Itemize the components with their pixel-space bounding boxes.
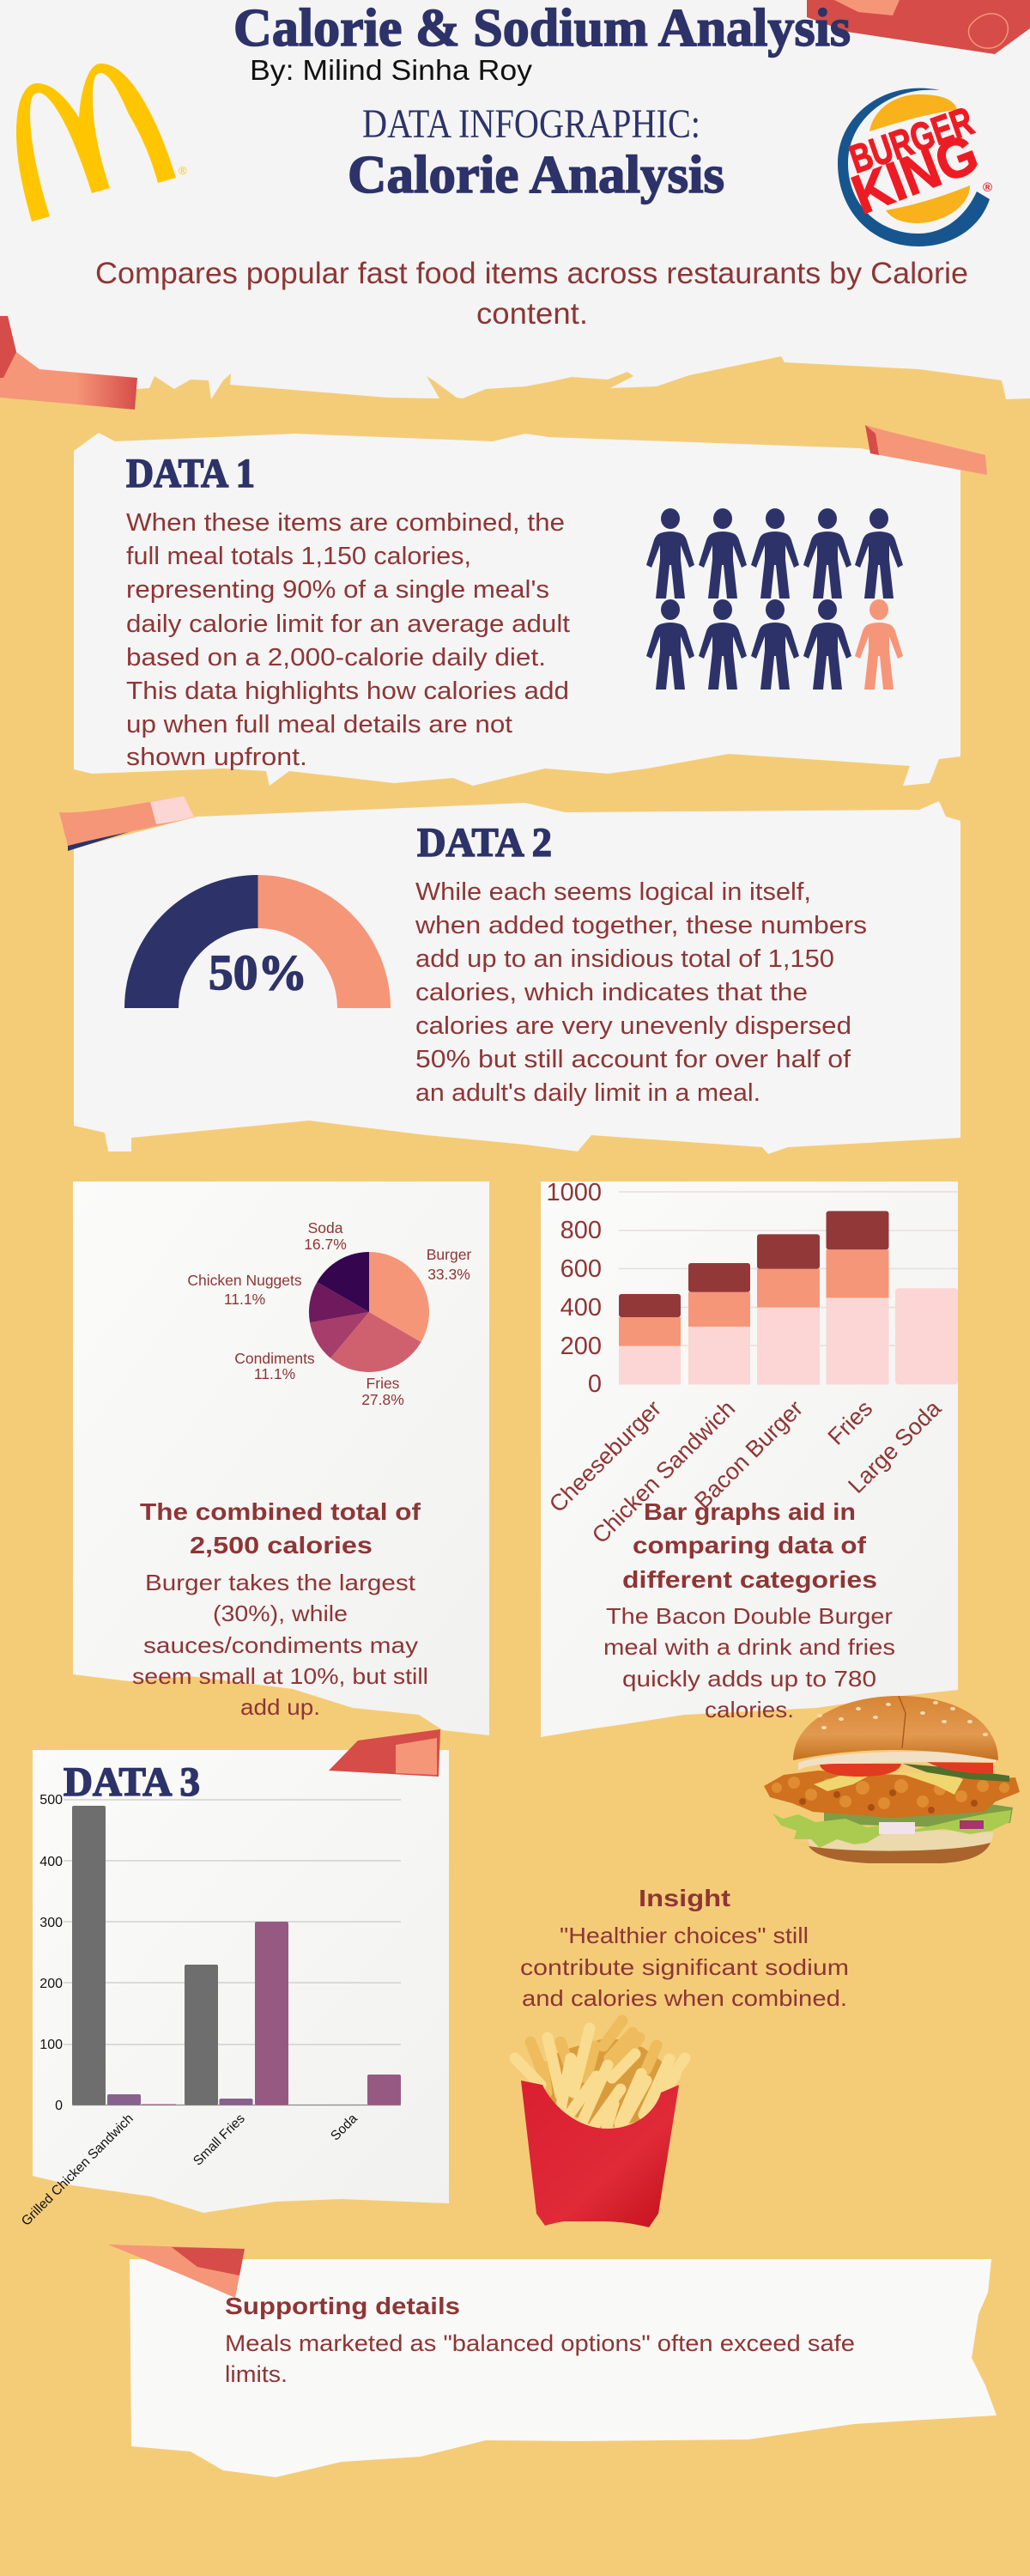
ribbon: data 1 — [865, 425, 987, 475]
bar chart: stacked calories: 0 — [588, 1370, 602, 1398]
card: data 3 chart — [19, 1729, 449, 2229]
heading: data 1: DATA 1 — [126, 451, 255, 496]
bar chart: grouped values: 300 — [39, 1916, 63, 1930]
pie labels: Fries — [367, 1375, 400, 1392]
heading: bar graphs: Bar graphs aid in — [644, 1498, 856, 1525]
pie labels: 33.3% — [427, 1266, 470, 1283]
bar chart: stacked calories: 400 — [560, 1294, 602, 1321]
bar chart: grouped values: Soda — [328, 2111, 360, 2143]
bar chart: stacked calories: Chicken Sandwich — [587, 1395, 740, 1548]
ribbon: top right — [807, 0, 1030, 54]
body text: combined total: seem small at 10%, but still — [132, 1663, 428, 1689]
illustration: french fries — [515, 2020, 685, 2227]
body text: data 1: representing 90% of a single meal's — [126, 576, 549, 604]
body text: data 2: While each seems logical in itself, — [415, 878, 811, 906]
body text: data 1: up when full meal details are not — [126, 711, 512, 738]
subtitle: data infographic: DATA INFOGRAPHIC: — [362, 101, 700, 147]
heading: supporting details: Supporting details — [225, 2293, 460, 2319]
insight text — [520, 1885, 849, 2011]
card: supporting details — [108, 2245, 997, 2477]
heading: data 2: DATA 2 — [417, 820, 552, 866]
heading: data 3: DATA 3 — [64, 1759, 200, 1805]
bar chart: grouped values: 400 — [39, 1855, 63, 1869]
card: pie chart — [73, 1182, 489, 1735]
body text: data 1: full meal totals 1,150 calories, — [126, 543, 471, 570]
card: stacked bar chart — [541, 1179, 958, 1737]
body text: bar graphs: The Bacon Double Burger — [606, 1603, 893, 1629]
logo: golden arches: ® — [179, 164, 187, 177]
pie labels: 16.7% — [304, 1236, 347, 1253]
insight text: and calories when combined. — [522, 1985, 847, 2011]
title: Calorie & Sodium Analysis — [233, 0, 851, 58]
gauge chart: 50%: 50% — [209, 945, 307, 1000]
author line: By: Milind Sinha Roy — [250, 54, 533, 86]
bar chart: stacked calories: Bacon Burger — [689, 1395, 808, 1514]
pie labels: 11.1% — [254, 1365, 295, 1382]
bar chart: stacked calories: Large Soda — [843, 1394, 947, 1498]
intro text: content. — [476, 297, 588, 331]
logo: burger king — [838, 88, 992, 246]
body text: data 2: when added together, these numbers — [415, 912, 867, 939]
body text: combined total — [132, 1570, 428, 1720]
logo: golden arches — [16, 64, 187, 222]
bar chart: grouped values: 200 — [39, 1977, 63, 1991]
bar chart: stacked calories: Cheeseburger — [544, 1395, 666, 1517]
body text: data 2: calories are very unevenly dispersed — [415, 1012, 851, 1040]
body text: data 1: based on a 2,000-calorie daily diet. — [126, 644, 546, 671]
bar chart: grouped values: Grilled Chicken Sandwich — [19, 2111, 136, 2229]
bar chart: grouped values: 0 — [55, 2099, 63, 2113]
pie labels — [187, 1219, 471, 1408]
logo: burger king: BURGER — [844, 98, 978, 181]
body text: data 2: calories, which indicates that the — [415, 979, 808, 1006]
pie labels: 27.8% — [361, 1391, 404, 1408]
body text: combined total: add up. — [240, 1694, 320, 1720]
body text: data 1 — [126, 509, 570, 771]
pie labels: Burger — [427, 1246, 471, 1263]
body text: data 2: 50% but still account for over half of — [415, 1046, 851, 1073]
bar chart: stacked calories: 600 — [560, 1255, 602, 1283]
heading: combined total: 2,500 calories — [190, 1532, 373, 1558]
heading: bar graphs — [622, 1498, 877, 1593]
heading: combined total — [140, 1498, 421, 1558]
body text: bar graphs — [603, 1603, 895, 1722]
body text: bar graphs: calories. — [705, 1697, 794, 1722]
pie chart: calorie share — [309, 1252, 429, 1372]
body text: combined total: sauces/condiments may — [143, 1632, 418, 1658]
ribbon: data 2 — [59, 796, 194, 851]
intro text — [95, 257, 968, 331]
pie labels: Condiments — [234, 1350, 315, 1367]
body text: combined total: (30%), while — [213, 1601, 348, 1626]
panel: data 2 — [59, 796, 960, 1154]
icon: people pictogram, 9 of 10 highlighted — [646, 508, 903, 690]
gauge chart: 50% — [124, 875, 391, 1008]
ribbon: data 3 — [329, 1729, 440, 1777]
body text: data 1: shown upfront. — [126, 744, 307, 771]
bar chart: grouped values: 500 — [39, 1793, 63, 1807]
bar chart: grouped values: Small Fries — [191, 2111, 248, 2169]
insight text: "Healthier choices" still — [560, 1923, 809, 1948]
heading: bar graphs: comparing data of — [633, 1532, 867, 1558]
panel: data 1 — [74, 425, 987, 786]
logo: burger king: KING — [844, 122, 986, 226]
heading: combined total: The combined total of — [140, 1498, 421, 1525]
illustration: crispy chicken burger — [764, 1696, 1020, 1863]
body text: data 1: daily calorie limit for an average adult — [126, 611, 570, 638]
body text: combined total: Burger takes the largest — [145, 1570, 416, 1595]
bar chart: grouped values — [19, 1793, 401, 2229]
body text: data 2: add up to an insidious total of 1,150 — [415, 945, 834, 973]
body text: data 1: When these items are combined, the — [126, 509, 565, 537]
body text: bar graphs: meal with a drink and fries — [603, 1634, 895, 1660]
bar chart: grouped values: 100 — [39, 2038, 63, 2052]
header panel — [0, 0, 1030, 410]
pie labels: Chicken Nuggets — [187, 1272, 302, 1289]
body text: data 2 — [415, 878, 867, 1107]
bar chart: stacked calories: 800 — [560, 1217, 602, 1244]
body text: data 2: an adult's daily limit in a meal. — [415, 1079, 760, 1107]
ribbon: supporting details — [108, 2245, 245, 2298]
bar chart: stacked calories — [544, 1179, 958, 1548]
body text: supporting details: limits. — [225, 2361, 288, 2387]
pie labels: 11.1% — [224, 1291, 265, 1308]
insight text: contribute significant sodium — [520, 1954, 849, 1980]
body text: data 1: This data highlights how calories add — [126, 677, 569, 705]
body text: supporting details — [225, 2330, 855, 2387]
body text: bar graphs: quickly adds up to 780 — [622, 1666, 876, 1692]
bar chart: stacked calories: Fries — [823, 1395, 877, 1450]
bar chart: stacked calories: 200 — [560, 1333, 602, 1360]
bar chart: stacked calories: 1000 — [546, 1179, 602, 1206]
body text: supporting details: Meals marketed as "balanced options" often exceed safe — [225, 2330, 855, 2356]
pie labels: Soda — [308, 1219, 343, 1236]
insight text: Insight — [639, 1885, 730, 1911]
ribbon: lower left — [0, 316, 137, 410]
heading: bar graphs: different categories — [622, 1566, 877, 1593]
intro text: Compares popular fast food items across restaurants by Calorie — [95, 257, 968, 290]
heading: calorie analysis: Calorie Analysis — [348, 146, 724, 204]
logo: burger king: ® — [983, 180, 992, 195]
